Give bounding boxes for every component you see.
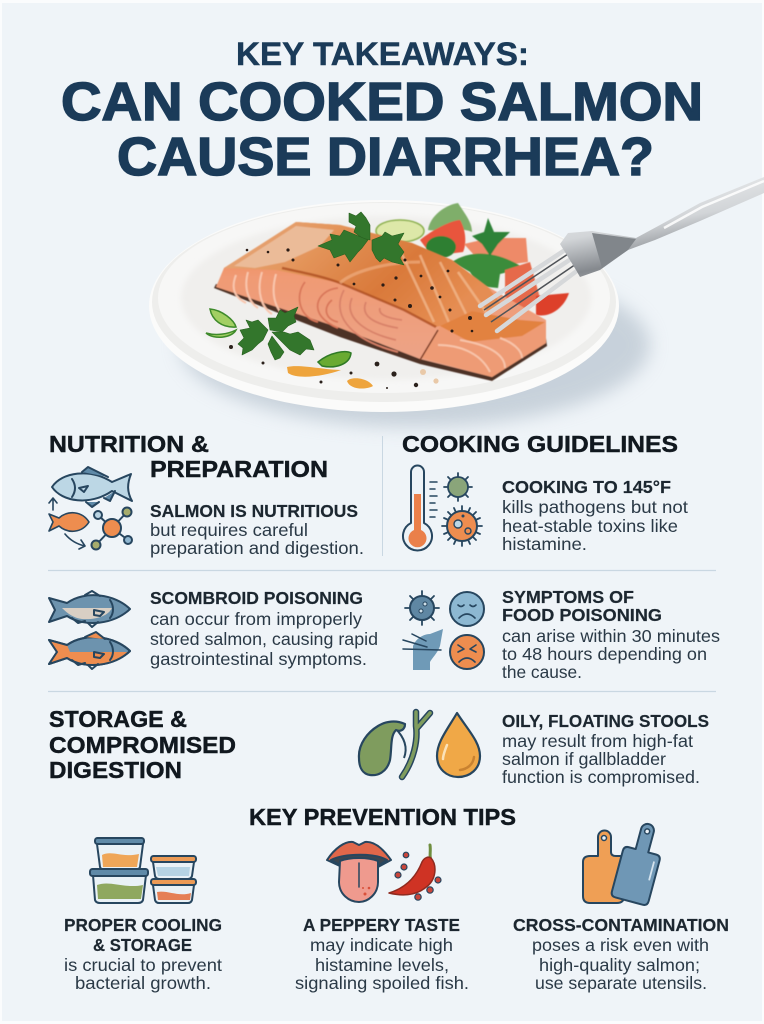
text: scombroid poisoning — [150, 588, 378, 669]
text: cross-contamination: poses a risk even with — [532, 935, 709, 955]
title line one: CAN COOKED SALMON — [61, 72, 703, 132]
text: symptoms of food poisoning: the cause. — [502, 662, 582, 682]
text: proper cooling and storage: PROPER COOLING — [64, 915, 222, 935]
text: a peppery taste — [295, 915, 469, 993]
text: cooking to 145F: COOKING TO 145°F — [502, 477, 671, 497]
text: salmon is nutritious: SALMON IS NUTRITIOUS — [150, 501, 358, 521]
text: a peppery taste: histamine levels, — [315, 955, 449, 975]
text: cross-contamination: high-quality salmon; — [539, 955, 700, 975]
heading: nutrition and preparation: PREPARATION — [150, 456, 328, 482]
text: proper cooling and storage: is crucial to prevent — [64, 955, 222, 975]
text: scombroid poisoning: gastrointestinal symptoms. — [150, 649, 367, 669]
flesh ridges — [234, 272, 288, 318]
text: symptoms of food poisoning: SYMPTOMS OF — [502, 587, 634, 607]
text: scombroid poisoning: can occur from improperly — [150, 609, 362, 629]
salmon fillet — [214, 222, 547, 381]
heading: nutrition and preparation: NUTRITION & — [49, 431, 209, 457]
fork — [480, 177, 764, 331]
heading: cooking guidelines: COOKING GUIDELINES — [402, 431, 678, 457]
icon: symptoms — [403, 591, 484, 670]
text: cross-contamination: CROSS-CONTAMINATION — [513, 915, 729, 935]
title line two: CAUSE DIARRHEA? — [117, 127, 654, 187]
plate — [149, 200, 619, 412]
text: salmon is nutritious — [150, 501, 364, 558]
plate shadow — [180, 263, 650, 427]
heading: storage and compromised digestion: DIGESTION — [49, 757, 182, 783]
text: oily floating stools: OILY, FLOATING STOOLS — [502, 711, 709, 731]
hero: salmon on a plate with fork — [149, 177, 764, 427]
text: salmon is nutritious: but requires careful — [150, 520, 308, 540]
icon: storage containers — [90, 838, 196, 903]
pepper flecks — [246, 248, 473, 332]
heading: storage and compromised digestion: STORAGE & — [49, 706, 187, 732]
text: proper cooling and storage — [64, 915, 222, 993]
text: symptoms of food poisoning: to 48 hours depending on — [502, 644, 707, 664]
garnish on plate — [206, 307, 439, 389]
text: symptoms of food poisoning — [502, 587, 720, 682]
text: scombroid poisoning: SCOMBROID POISONING — [150, 588, 363, 608]
text: cooking to 145F: histamine. — [502, 534, 587, 554]
text: symptoms of food poisoning: can arise within 30 minutes — [502, 626, 720, 646]
title — [61, 36, 703, 187]
text: a peppery taste: may indicate high — [310, 935, 453, 955]
parsley on salmon — [318, 212, 404, 265]
icon: gallbladder and oil drop — [359, 712, 480, 777]
text: a peppery taste: signaling spoiled fish. — [295, 973, 469, 993]
text: proper cooling and storage: & STORAGE — [93, 935, 192, 955]
heading: storage and compromised digestion: COMPROMISED — [49, 732, 236, 758]
cut piece — [422, 311, 546, 377]
text: cooking to 145F: kills pathogens but not — [502, 497, 688, 517]
text: cooking to 145F: heat-stable toxins like — [502, 516, 678, 536]
text: oily floating stools: may result from high-fat — [502, 731, 693, 751]
text: proper cooling and storage: bacterial growth. — [75, 973, 211, 993]
text: scombroid poisoning: stored salmon, causing rapid — [150, 629, 378, 649]
text: oily floating stools — [502, 711, 709, 787]
heading: key prevention tips: KEY PREVENTION TIPS — [249, 804, 516, 830]
icon: fish and molecule — [49, 467, 132, 550]
icon: two salmon — [49, 591, 130, 669]
text: cooking to 145F — [502, 477, 688, 554]
text: oily floating stools: function is compromised. — [502, 767, 700, 787]
text: salmon is nutritious: preparation and digestion. — [150, 538, 364, 558]
icon: tongue and chili pepper — [327, 842, 441, 902]
text: cross-contamination: use separate utensils. — [535, 973, 707, 993]
text: symptoms of food poisoning: FOOD POISONING — [502, 605, 662, 625]
salad — [376, 203, 569, 322]
icon: cutting boards — [583, 819, 668, 906]
text: oily floating stools: salmon if gallbladder — [502, 749, 666, 769]
text: a peppery taste: A PEPPERY TASTE — [303, 915, 460, 935]
section dividers — [48, 570, 716, 692]
seared top — [224, 222, 502, 327]
icon: thermometer and pathogens — [403, 466, 482, 550]
text: cross-contamination — [513, 915, 729, 993]
title kicker: KEY TAKEAWAYS: — [236, 36, 529, 72]
heading: storage and compromised digestion — [49, 706, 236, 783]
